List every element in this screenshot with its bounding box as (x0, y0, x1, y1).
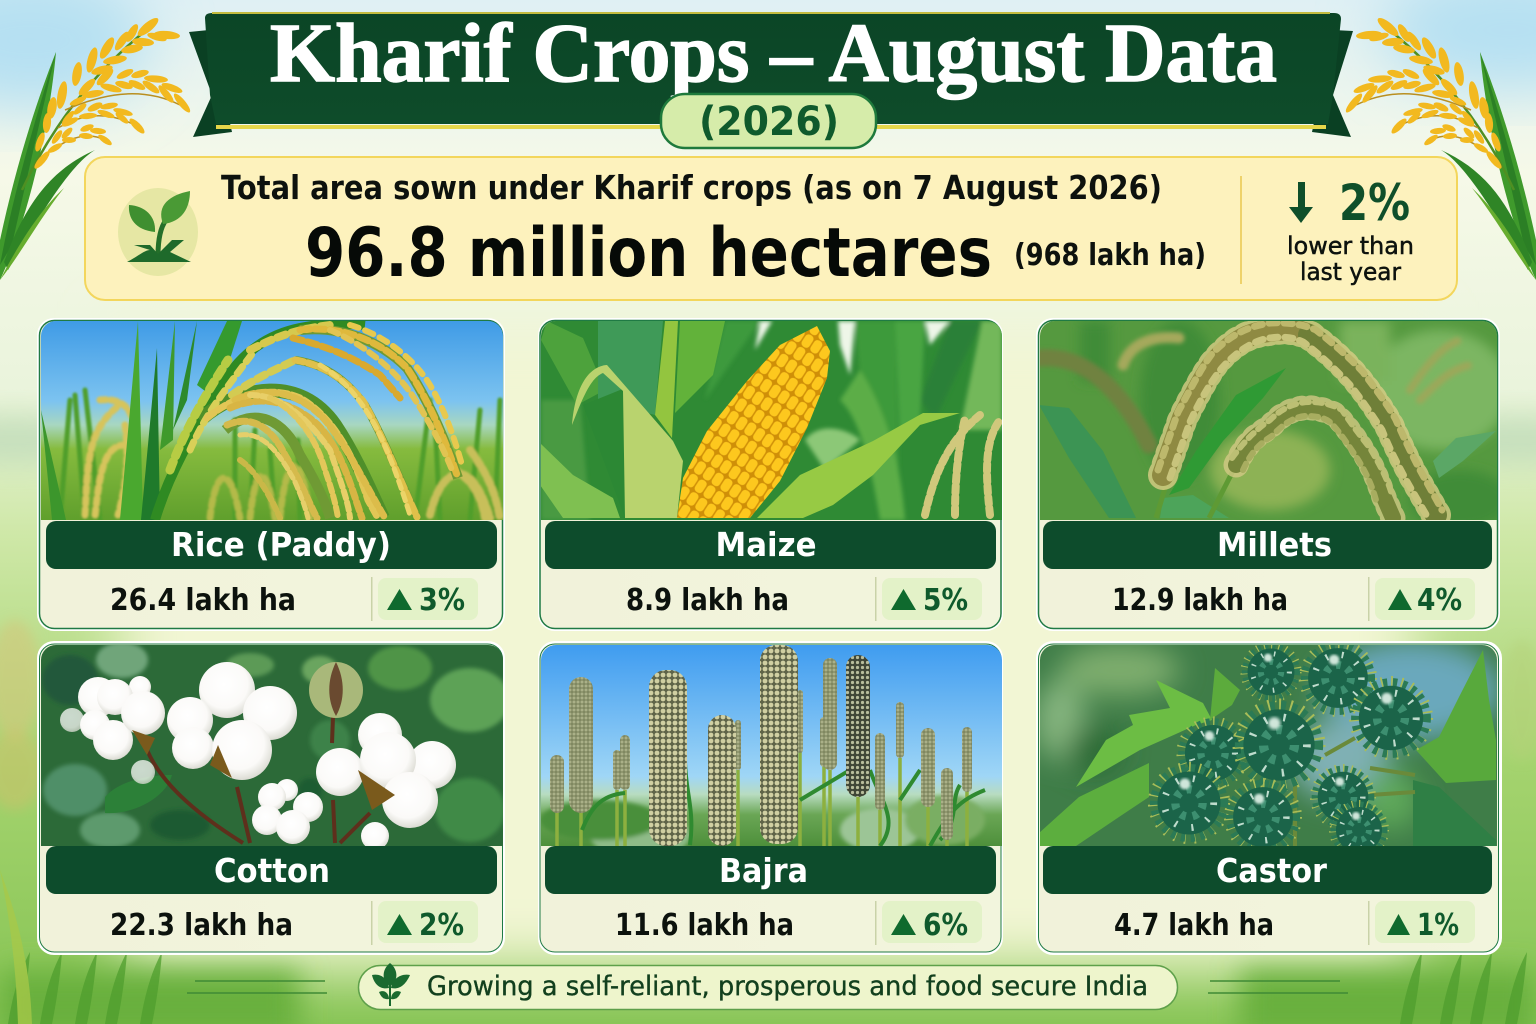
card: Millets (1036, 318, 1510, 631)
bajra photo (540, 645, 1002, 859)
change badge (1375, 578, 1475, 620)
icon: leaf sprout (372, 963, 410, 1006)
icon: down arrow (1289, 182, 1313, 223)
name bar (545, 846, 996, 894)
area value: 8.9 lakh ha (626, 583, 789, 618)
total area in lakh: (968 lakh ha) (1014, 238, 1206, 273)
decoration: right rice stalks (1344, 15, 1536, 280)
name bar: Cotton (214, 851, 330, 890)
maize photo (540, 321, 1002, 521)
change caption: lower than (1287, 232, 1414, 260)
summary panel (85, 157, 1457, 300)
year pill (661, 94, 876, 148)
icon: sprout (118, 188, 198, 276)
name bar (46, 846, 497, 894)
change badge (882, 578, 982, 620)
area value: 12.9 lakh ha (1112, 583, 1288, 618)
name bar (545, 521, 996, 569)
name bar (1043, 521, 1492, 569)
card: Castor (1035, 640, 1502, 955)
year pill: (2026) (699, 99, 839, 145)
tagline text: Growing a self-reliant, prosperous and food secure India (427, 971, 1148, 1002)
change badge (1375, 901, 1475, 943)
change badge: 6% (923, 908, 968, 943)
change badge (882, 901, 982, 943)
name bar (1043, 846, 1492, 894)
decoration: left rice stalks (0, 15, 192, 280)
change badge (378, 901, 478, 943)
millets photo (1039, 320, 1510, 530)
name bar: Bajra (719, 851, 808, 890)
title: Kharif Crops – August Data (270, 7, 1277, 100)
change badge (378, 578, 478, 620)
area value: 26.4 lakh ha (110, 583, 296, 618)
change badge: 2% (419, 908, 464, 943)
change badge: 1% (1417, 908, 1459, 943)
total area figure: 96.8 million hectares (305, 214, 992, 293)
card: Bajra (538, 641, 1003, 955)
name bar (46, 521, 497, 569)
card: Maize (538, 318, 1003, 631)
rice photo (41, 321, 503, 521)
footer tagline (187, 963, 1348, 1010)
area value: 22.3 lakh ha (110, 908, 293, 943)
summary heading: Total area sown under Kharif crops (as on 7 August 2026) (221, 168, 1162, 207)
card: Cotton (37, 641, 510, 955)
change caption: last year (1300, 258, 1401, 286)
card: Rice (37, 318, 505, 631)
area value: 4.7 lakh ha (1114, 908, 1274, 943)
change percent: 2% (1339, 174, 1410, 232)
name bar: Millets (1217, 525, 1332, 564)
area value: 11.6 lakh ha (615, 908, 794, 943)
name bar: Castor (1216, 851, 1328, 890)
change badge: 4% (1417, 583, 1462, 618)
cotton photo (41, 642, 510, 850)
castor photo (1035, 640, 1500, 856)
title banner (189, 7, 1353, 137)
change badge: 3% (419, 583, 465, 618)
name bar: Rice (Paddy) (171, 525, 391, 564)
change badge: 5% (923, 583, 968, 618)
decoration: bottom grass (0, 870, 1527, 1024)
change caption (1287, 232, 1414, 286)
name bar: Maize (716, 525, 816, 564)
